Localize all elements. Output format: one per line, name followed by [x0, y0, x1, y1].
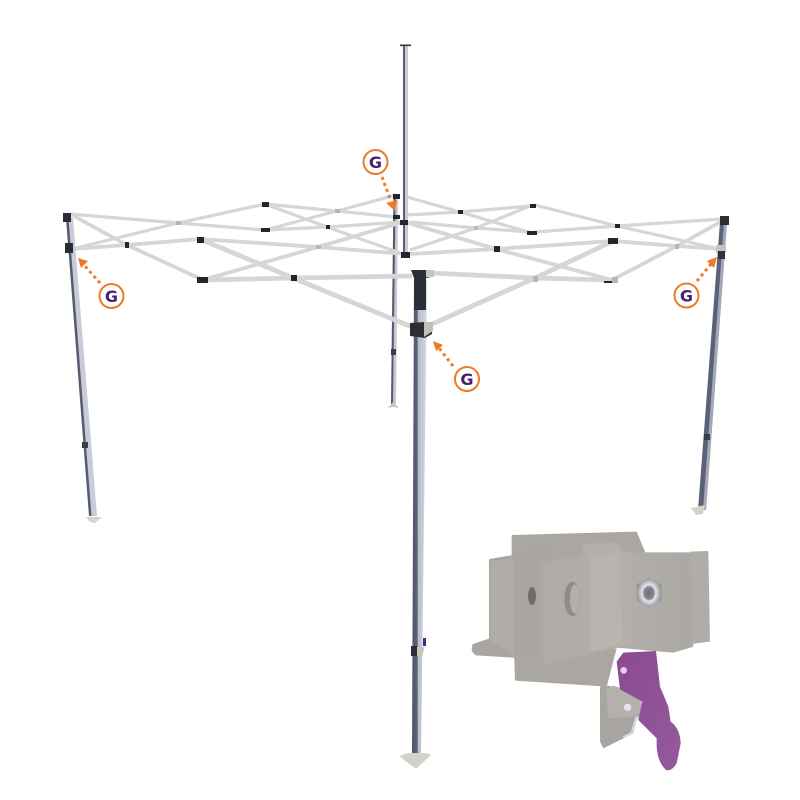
lever rivet: [620, 667, 627, 674]
truss joints: [125, 194, 679, 283]
hinge rivet: [624, 704, 631, 711]
badge: front G: G: [460, 370, 474, 389]
arrow: left G: [78, 258, 100, 283]
badge: right G: G: [680, 286, 693, 306]
arrow: right G: [697, 257, 717, 281]
lower hinge plate: [600, 686, 642, 748]
hex nut: [637, 578, 661, 608]
base plate: [399, 753, 431, 769]
left hole: [528, 587, 536, 605]
front plate crease: [590, 553, 622, 652]
front hole highlight: [570, 584, 580, 614]
inset: G joint close-up: [473, 532, 710, 770]
front leg: [399, 270, 434, 769]
badge: left G: [100, 284, 124, 308]
badge: back G: [364, 150, 388, 174]
left block: [473, 543, 550, 657]
hinge tab: [606, 686, 642, 718]
badge: left G: G: [105, 287, 118, 306]
center pole: [400, 44, 411, 256]
metal spring clip: [623, 717, 637, 737]
front hole: [564, 582, 580, 616]
purple lever: [617, 651, 681, 770]
left block side highlight: [491, 558, 514, 655]
badge: back G: G: [369, 153, 382, 172]
canopy scissor truss: [70, 195, 724, 327]
back leg: [388, 196, 399, 408]
arrow: front G: [433, 341, 453, 366]
badge: front G: [455, 367, 479, 391]
right rear flange: [690, 551, 710, 644]
lower body: [514, 648, 617, 687]
arrow: back G: [382, 177, 397, 211]
left leg: [63, 213, 102, 523]
badge: right G: [674, 284, 698, 308]
back collar: [512, 532, 645, 587]
right leg: [691, 216, 729, 515]
front plate: [541, 542, 692, 664]
